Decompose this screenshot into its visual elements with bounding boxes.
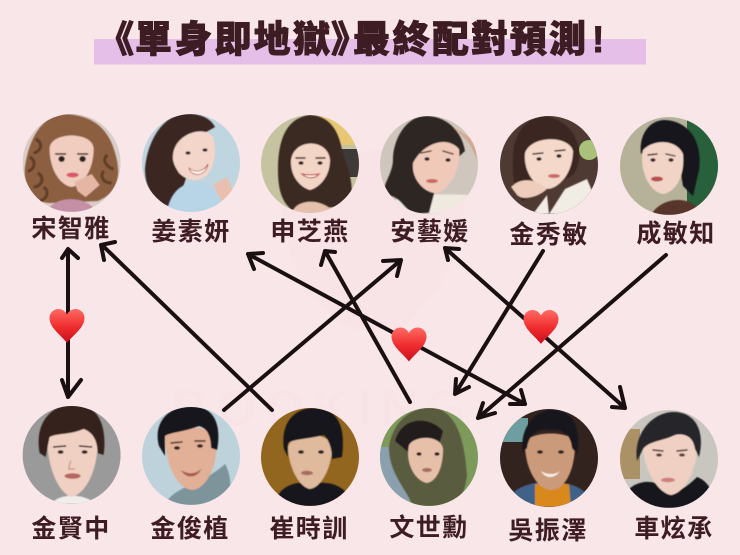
portrait: 金秀敏: [500, 116, 599, 214]
portrait: 申芝燕: [261, 115, 359, 213]
portrait: 文世勳: [380, 408, 478, 506]
portrait: 成敏知: [620, 117, 718, 215]
name: 金俊植: 金俊植: [150, 514, 230, 543]
name: 車炫承: 車炫承: [634, 515, 714, 543]
arrow: 崔時訓 to 宋智雅: [101, 242, 272, 410]
arrow: 宋智雅 and 金賢中: [62, 249, 81, 397]
arrow: 安藝媛 and 車炫承: [445, 248, 625, 408]
watermark logo: BOOKING: [172, 380, 474, 436]
title: 《單身即地獄》最終配對預測!: [97, 19, 604, 60]
portrait: 車炫承: [620, 410, 718, 508]
portrait: 安藝媛: [380, 116, 478, 214]
portrait: 宋智雅: [23, 114, 121, 212]
arrow: 金俊植 to 安藝媛: [224, 260, 401, 410]
title highlight bar: [94, 39, 646, 64]
portrait: 金俊植: [142, 406, 240, 505]
heart: 宋智雅 and 金賢中: [50, 309, 84, 343]
heart: 安藝媛 and 車炫承: [524, 310, 558, 344]
arrow: 文世勳 to 申芝燕: [321, 251, 410, 402]
name: 成敏知: 成敏知: [636, 220, 716, 248]
name: 安藝媛: 安藝媛: [390, 218, 470, 246]
arrow: 金秀敏 to 文世勳: [455, 251, 543, 394]
name: 文世勳: 文世勳: [389, 514, 469, 542]
name: 姜素妍: 姜素妍: [151, 218, 231, 246]
heart: 申芝燕 and 吳振澤: [392, 328, 426, 362]
name: 崔時訓: 崔時訓: [269, 515, 349, 543]
name: 申芝燕: 申芝燕: [270, 218, 350, 246]
name: 宋智雅: 宋智雅: [31, 215, 111, 243]
arrow: 成敏知 to 文世勳: [478, 255, 666, 418]
name: 金秀敏: 金秀敏: [509, 221, 589, 249]
name: 金賢中: 金賢中: [31, 515, 111, 543]
name: 吳振澤: 吳振澤: [508, 517, 588, 545]
watermark logo: [172, 150, 474, 436]
portrait: 吳振澤: [500, 409, 598, 507]
portrait: 金賢中: [23, 404, 121, 504]
portrait: 姜素妍: [142, 114, 240, 212]
portrait: 崔時訓: [261, 408, 359, 506]
arrow: 申芝燕 and 吳振澤: [248, 253, 525, 404]
